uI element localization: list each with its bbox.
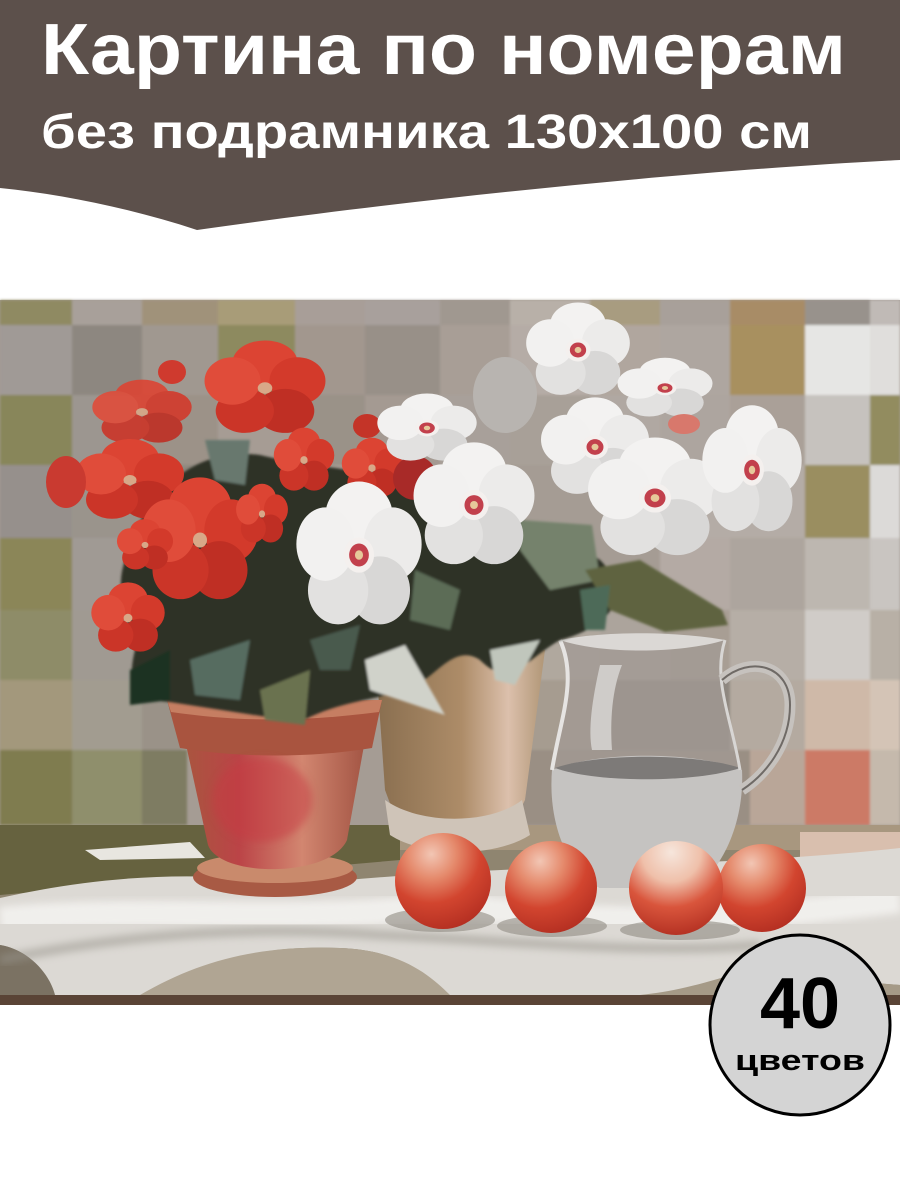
badge: 40 colors [710,935,890,1115]
table [0,825,900,1005]
subtitle: без подрамника 130х100 см [41,106,812,159]
glass jug [551,633,790,888]
header banner [0,0,900,230]
cloth [0,848,900,1004]
badge number: 40 [760,964,840,1044]
title: Картина по номерам [41,10,846,90]
foliage [121,440,728,725]
painting [0,300,900,1005]
tiled wall [0,300,900,825]
red flowers [46,340,437,652]
back pot [378,640,545,852]
white flowers [296,302,802,624]
front pot [167,700,382,897]
peaches [385,833,806,940]
badge label: цветов [735,1045,865,1077]
